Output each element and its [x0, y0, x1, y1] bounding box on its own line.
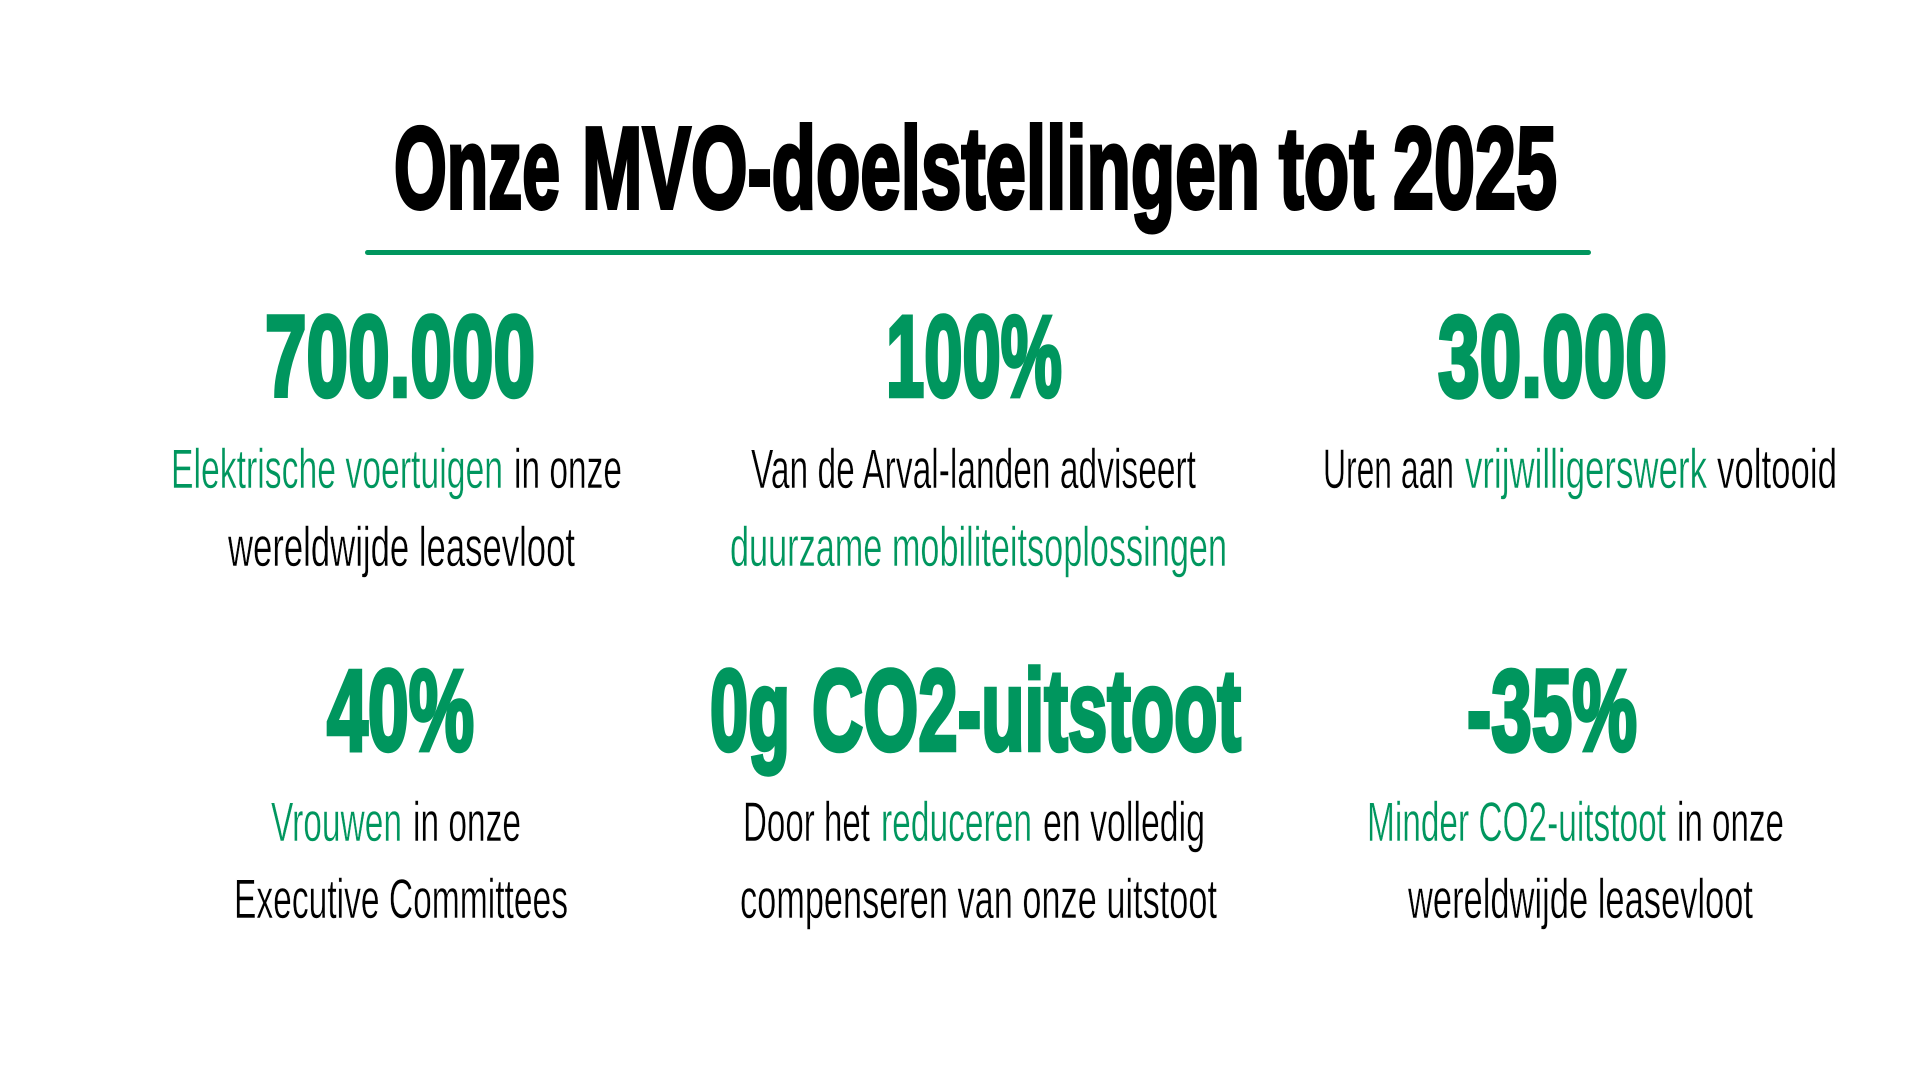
description: volunteer hours: vrijwilligerswerk	[1465, 437, 1708, 500]
description: electric vehicles	[171, 437, 622, 578]
description: women in committees	[234, 790, 568, 930]
number: 30.000: 30.000	[1438, 293, 1667, 421]
description: electric vehicles: in onze	[514, 437, 622, 500]
description: electric vehicles: wereldwijde leasevloot	[227, 515, 575, 578]
description: reducing and compensating: reduceren	[881, 790, 1032, 853]
description: reducing and compensating	[740, 790, 1217, 930]
description: women in committees: Executive Committees	[234, 867, 568, 930]
description: sustainable mobility: Van de Arval-landen adviseert	[751, 437, 1196, 500]
title: Onze	[394, 103, 560, 233]
number: 0g CO2-uitstoot: CO2-uitstoot	[812, 647, 1241, 775]
description: reducing and compensating: compenseren van onze uitstoot	[740, 867, 1217, 930]
number: 0g CO2-uitstoot: 0g	[710, 647, 790, 775]
panel: -35% CO2 emissions	[1367, 647, 1784, 930]
description: sustainable mobility	[730, 437, 1227, 578]
description: reducing and compensating: Door het	[743, 790, 870, 853]
description: less CO2 in lease fleet	[1367, 790, 1784, 930]
title: 2025	[1393, 103, 1557, 233]
panel: 40% women	[234, 647, 568, 930]
description: reducing and compensating: en volledig	[1043, 790, 1205, 853]
number: -35%: -35%	[1467, 647, 1637, 775]
panel: 100% sustainable mobility	[730, 293, 1227, 578]
number: 100%: 100%	[886, 293, 1062, 421]
description: volunteer hours: voltooid	[1717, 437, 1837, 500]
description: volunteer hours: Uren aan	[1323, 437, 1454, 500]
title underline	[365, 250, 1591, 255]
panel: 30.000 volunteer hours	[1323, 293, 1837, 500]
description: women in committees: in onze	[413, 790, 521, 853]
panel: 0g CO2 emissions	[710, 647, 1241, 930]
description: women in committees: Vrouwen	[271, 790, 402, 853]
description: less CO2 in lease fleet: Minder CO2-uitstoot	[1367, 790, 1666, 853]
panel: 700.000 electric vehicles	[171, 293, 622, 578]
number: 700.000: 700.000	[265, 293, 535, 421]
number: 0g CO2-uitstoot	[710, 647, 1241, 775]
description: electric vehicles: Elektrische voertuigen	[171, 437, 503, 500]
description: less CO2 in lease fleet: in onze	[1677, 790, 1784, 853]
number: 40%: 40%	[327, 647, 474, 775]
description: sustainable mobility: duurzame mobiliteitsoplossingen	[730, 515, 1227, 578]
title: MVO-doelstellingen	[582, 103, 1260, 233]
title: tot	[1279, 103, 1374, 233]
